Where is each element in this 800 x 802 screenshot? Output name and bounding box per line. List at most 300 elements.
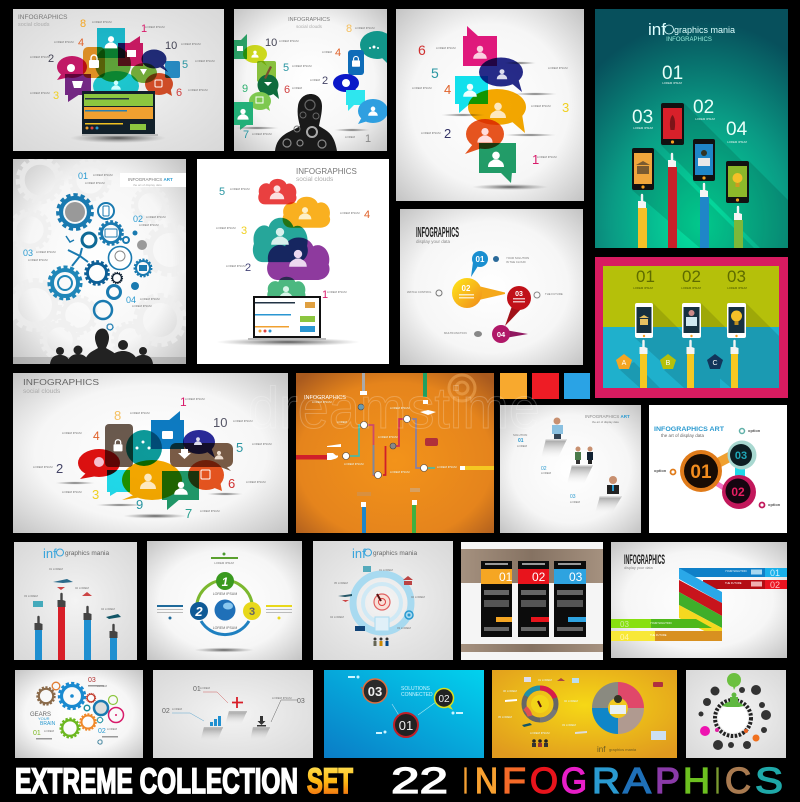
numbered labels: LOREM IPSUM — [188, 88, 208, 92]
numbered labels: 5 — [236, 440, 243, 455]
numbered labels: 9 — [242, 83, 248, 95]
numbered labels: LOREM IPSUM — [252, 442, 272, 446]
numbered labels: LOREM IPSUM — [139, 223, 159, 227]
numbered labels: LOREM IPSUM — [279, 39, 299, 43]
top caption — [211, 552, 238, 565]
bottom bands: THE FUTURE — [650, 633, 667, 637]
labels: 01 LOREM — [379, 568, 394, 572]
brand: graphics mania — [609, 747, 637, 752]
labels: 05 LOREM — [334, 581, 349, 585]
numbered labels: LOREM IPSUM — [537, 155, 557, 159]
numbered labels: 3 — [92, 487, 99, 502]
numbered labels — [30, 18, 215, 102]
numbered labels: 4 — [78, 37, 84, 49]
numbered labels: LOREM IPSUM — [146, 215, 166, 219]
numbered labels: LOREM IPSUM — [292, 64, 312, 68]
title: inf — [352, 546, 366, 561]
labels: 02 LOREM — [564, 699, 579, 703]
bubbles — [455, 26, 526, 183]
numbers — [632, 63, 748, 144]
droplets: 04 — [497, 330, 506, 339]
badge 01: 01 — [399, 718, 413, 733]
title: 22 infographics: P — [655, 760, 680, 801]
panel: globe cycle — [147, 541, 302, 660]
heading: display your data — [624, 566, 654, 570]
droplets — [452, 251, 531, 343]
long shadows — [620, 303, 779, 388]
title — [352, 546, 417, 561]
nodes and globe: 1 — [222, 575, 229, 589]
bubbles — [698, 673, 771, 750]
icons — [33, 579, 121, 619]
droplets: 03 — [515, 291, 523, 298]
numbered labels: LOREM IPSUM — [62, 490, 82, 494]
numbered labels: 8 — [114, 408, 121, 423]
labels: WATCH CONTROL — [407, 290, 432, 294]
title: graphics mania — [373, 550, 417, 557]
numbered labels: LOREM IPSUM — [531, 104, 551, 108]
title: extreme collection set: SET — [307, 762, 353, 801]
numbered labels: 5 — [182, 59, 188, 71]
numbers: LOREM IPSUM — [727, 140, 747, 144]
numbered labels: LOREM IPSUM — [272, 696, 292, 700]
numbered labels: LOREM IPSUM — [30, 91, 50, 95]
heading: INFOGRAPHICS — [23, 378, 99, 387]
numbered labels: LOREM IPSUM — [246, 480, 266, 484]
ring and target — [353, 574, 411, 632]
bottom bands: 04 — [620, 633, 629, 642]
heading: the art of display data — [133, 183, 162, 187]
numbered labels: LOREM IPSUM — [548, 66, 568, 70]
nodes and globe: LOREM IPSUM — [213, 592, 237, 596]
icons and captions: LOREM — [337, 420, 348, 424]
people ring — [715, 692, 751, 736]
title: 22 infographics: A — [623, 760, 651, 801]
blue gears — [49, 195, 151, 330]
title: 22 infographics: R — [592, 760, 620, 801]
labels: 06 LOREM — [503, 689, 518, 693]
numbered labels: 7 — [243, 129, 249, 141]
panel: stacked clouds — [197, 159, 389, 364]
labels: IN THE CLOUD — [506, 260, 526, 264]
icons and captions: LOREM IPSUM — [390, 470, 410, 474]
clouds — [253, 179, 330, 302]
panel: icons on steps — [153, 670, 313, 758]
panel: target bulb — [313, 541, 453, 660]
people — [552, 418, 619, 494]
panel: droplet diagram — [400, 209, 583, 365]
labels: 02 LOREM — [75, 586, 90, 590]
panel: social clouds with gear silhouette — [234, 9, 394, 151]
laptop — [216, 296, 360, 346]
arms and hands — [638, 153, 743, 248]
numbered labels: LOREM — [345, 135, 356, 139]
cycle ring — [197, 580, 252, 635]
long shadows — [632, 103, 788, 248]
icons and captions: LOREM IPSUM — [344, 462, 364, 466]
option markers: option — [768, 502, 781, 507]
numbered labels: 4 — [364, 209, 370, 221]
numbered labels: 6 — [284, 84, 290, 96]
phones — [635, 303, 746, 338]
numbers: 01 — [662, 63, 683, 84]
title: 22 infographics: I — [715, 760, 720, 801]
numbered labels: 1 — [365, 133, 371, 145]
numbered labels: 4 — [444, 82, 451, 97]
labels: 03 — [570, 494, 576, 500]
numbered labels: 2 — [48, 53, 54, 65]
title — [43, 546, 109, 561]
numbered labels — [33, 395, 272, 521]
labels — [498, 678, 579, 735]
panel: yellow pie wheel — [492, 670, 677, 758]
caption: SOLUTIONS — [401, 686, 431, 692]
panel: gears brain — [15, 670, 143, 758]
title: 22 infographics: F — [502, 760, 526, 801]
badge 03 — [361, 679, 387, 703]
numbered labels: LOREM — [97, 684, 108, 688]
icons and captions: LOREM IPSUM — [437, 465, 457, 469]
flow line — [350, 419, 435, 475]
nodes and globe — [190, 572, 261, 630]
spiral — [449, 375, 475, 401]
left bubbles — [234, 34, 279, 130]
panel: pink frame phones — [595, 257, 788, 398]
numbered labels: 3 — [562, 100, 569, 115]
heading: INFOGRAPHICS — [304, 395, 346, 401]
heading — [416, 224, 459, 244]
numbered labels: LOREM IPSUM — [421, 131, 441, 135]
numbered labels: LOREM IPSUM — [252, 132, 272, 136]
bottom bands: 03 — [620, 620, 629, 629]
labels: 01 — [518, 438, 524, 444]
panel: social circle — [686, 670, 786, 758]
numbers: LOREM IPSUM — [633, 286, 653, 290]
panel: connected 01 02 03 circles — [649, 405, 787, 533]
title: 22 infographics: C — [725, 760, 751, 801]
numbered labels — [23, 171, 166, 308]
arms — [640, 340, 738, 388]
circle 01: 01 — [690, 462, 712, 483]
pentagon badges — [616, 354, 723, 369]
labels: 02 — [541, 466, 547, 472]
card 01 — [481, 561, 513, 637]
brand — [597, 745, 637, 754]
connectors — [716, 454, 740, 492]
caption: CONNECTED — [401, 692, 433, 698]
numbered labels: LOREM — [200, 686, 211, 690]
labels: LOREM IPSUM — [530, 731, 550, 735]
pale background gears — [11, 158, 194, 358]
caption — [30, 712, 56, 727]
heading: social clouds — [23, 388, 61, 395]
numbered labels: 6 — [228, 476, 235, 491]
card 02: 02 — [532, 570, 546, 584]
numbered labels: LOREM IPSUM — [216, 226, 236, 230]
numbered labels: 1 — [532, 152, 539, 167]
numbers: 02 — [693, 97, 714, 118]
bottom bands — [611, 619, 722, 642]
numbers — [634, 270, 747, 289]
heading: social clouds — [18, 22, 50, 28]
numbered labels: LOREM IPSUM — [36, 250, 56, 254]
labels: 05 LOREM — [498, 715, 513, 719]
numbered labels: 2 — [245, 262, 251, 274]
panel: blue circles — [324, 670, 484, 758]
heading: INFOGRAPHICS ART — [585, 414, 630, 419]
title: 22 infographics: G — [561, 760, 587, 801]
bottom bands: YOUR SOLUTION — [650, 621, 672, 625]
heading: the art of display data — [592, 420, 619, 424]
shadows — [441, 62, 557, 190]
labels: YOUR SOLUTION — [506, 256, 529, 260]
steps — [541, 439, 622, 513]
numbers: LOREM IPSUM — [662, 81, 682, 85]
numbered labels — [162, 686, 305, 715]
heading: INFOGRAPHICS ART — [654, 427, 724, 433]
labels: LOREM — [517, 444, 528, 448]
labels: 03 LOREM — [562, 723, 577, 727]
card 01: 01 — [499, 570, 513, 584]
badge 02: 02 — [438, 694, 450, 705]
labels: SOLUTION — [513, 433, 527, 437]
labels: 04 LOREM — [101, 607, 116, 611]
caption: BRAIN — [40, 721, 56, 727]
numbered labels: 6 — [176, 87, 182, 99]
nodes and globe: 3 — [249, 606, 255, 618]
title: extreme collection set: EXTREME COLLECTION — [15, 762, 298, 801]
numbers: LOREM IPSUM — [633, 126, 653, 130]
numbers: LOREM IPSUM — [727, 286, 747, 290]
droplets: 02 — [462, 284, 471, 293]
labels — [24, 567, 116, 611]
numbered labels: LOREM IPSUM — [28, 258, 48, 262]
labels: LOREM — [570, 500, 581, 504]
title: 22 infographics: O — [530, 760, 558, 801]
top bands: 02 — [770, 580, 780, 590]
title: inf — [648, 20, 666, 39]
numbered labels: LOREM IPSUM — [412, 86, 432, 90]
heading — [120, 173, 186, 187]
numbered labels: LOREM IPSUM — [195, 59, 215, 63]
heading — [23, 378, 99, 395]
heading: social clouds — [296, 24, 323, 29]
numbers: LOREM IPSUM — [681, 286, 701, 290]
numbered labels: LOREM IPSUM — [145, 25, 165, 29]
numbered labels: 9 — [136, 497, 143, 512]
top bands: THE FUTURE — [725, 581, 742, 585]
title: inf — [43, 546, 57, 561]
pentagon badges: C — [712, 360, 718, 367]
pie — [592, 682, 644, 734]
nodes and globe: LOREM IPSUM — [213, 626, 237, 630]
numbered labels — [412, 42, 569, 167]
pentagon badges: A — [622, 360, 627, 367]
icons and captions: LOREM IPSUM — [378, 435, 398, 439]
numbered labels: 8 — [346, 23, 352, 35]
silhouettes — [13, 328, 186, 364]
circle 03: 03 — [735, 450, 747, 462]
numbers: 04 — [726, 119, 748, 140]
badge 02 — [418, 688, 454, 715]
badge 01 — [392, 704, 418, 737]
numbered labels: LOREM IPSUM — [130, 411, 150, 415]
heading — [654, 427, 724, 438]
circle 02: 02 — [731, 485, 745, 499]
numbered labels: 4 — [335, 47, 341, 59]
side captions — [157, 605, 292, 620]
phones — [632, 103, 749, 203]
numbered labels: 2 — [444, 126, 451, 141]
labels: 02 LOREM — [411, 595, 426, 599]
gear silhouette — [275, 94, 337, 151]
title: 22 infographics: S — [755, 760, 783, 801]
numbered labels: 5 — [431, 65, 439, 81]
droplets: 01 — [476, 255, 485, 264]
panel: folded ribbons: INFOGRAPHICS — [624, 551, 665, 567]
arms and hands — [34, 593, 118, 660]
panel: pricing cards — [461, 542, 603, 660]
numbered labels: LOREM IPSUM — [230, 187, 250, 191]
panel: social clouds with laptop — [13, 9, 224, 151]
numbered labels: 02 — [133, 214, 143, 224]
numbered labels: 1 — [180, 395, 187, 409]
numbered labels — [242, 23, 375, 145]
numbered labels: 01 — [193, 686, 201, 693]
labels: LOREM — [541, 471, 552, 475]
numbered labels: LOREM IPSUM — [132, 304, 152, 308]
numbers: 02 — [682, 267, 701, 286]
labels: 01 LOREM — [538, 678, 553, 682]
numbered labels: 01 — [33, 730, 41, 737]
numbered labels: 02 — [98, 728, 106, 735]
numbered labels: LOREM IPSUM — [33, 465, 53, 469]
shadow — [194, 648, 254, 652]
heading: INFOGRAPHICS — [18, 14, 68, 21]
numbered labels — [33, 677, 118, 740]
numbered labels: LOREM IPSUM — [140, 297, 160, 301]
labels: 03 LOREM — [397, 626, 412, 630]
numbered labels: LOREM IPSUM — [340, 211, 360, 215]
numbered labels: 10 — [265, 37, 277, 49]
labels: 01 LOREM — [49, 567, 64, 571]
title: 22 infographics — [391, 760, 783, 801]
heading: the art of display data — [661, 433, 705, 438]
heading: social clouds — [296, 176, 334, 183]
numbered labels: 3 — [53, 90, 59, 102]
numbered labels: 8 — [80, 18, 86, 30]
icons and captions: LOREM IPSUM — [390, 406, 410, 410]
labels — [407, 256, 563, 337]
numbered labels: LOREM IPSUM — [93, 173, 113, 177]
numbered labels: 2 — [56, 461, 63, 476]
small icons — [505, 677, 666, 747]
numbered labels: 04 — [126, 295, 136, 305]
numbered labels: LOREM IPSUM — [233, 419, 253, 423]
bubbles — [78, 411, 233, 510]
title: graphics mania — [674, 25, 735, 35]
numbers: 01 — [636, 267, 655, 286]
numbered labels: LOREM IPSUM — [185, 397, 205, 401]
labels: MULTIFUNCTION — [444, 331, 467, 335]
title — [649, 23, 735, 41]
numbered labels: 1 — [141, 23, 147, 35]
icons — [338, 566, 413, 646]
nodes — [342, 404, 428, 478]
numbered labels: LOREM — [322, 50, 333, 54]
numbered labels: LOREM — [44, 729, 55, 733]
callout lines — [172, 692, 298, 722]
pentagon badges: B — [666, 360, 671, 367]
heading — [585, 414, 630, 424]
numbered labels — [216, 186, 370, 301]
panel: folded ribbons — [611, 542, 787, 658]
panel: teal phones mania — [595, 9, 788, 248]
caption — [348, 676, 463, 734]
speech bubble cluster — [57, 28, 180, 102]
title: INFOGRAPHICS — [666, 37, 712, 43]
labels — [513, 433, 581, 504]
arms — [296, 373, 494, 533]
badge 03: 03 — [368, 684, 382, 699]
numbered labels: LOREM IPSUM — [200, 509, 220, 513]
numbered labels: LOREM IPSUM — [181, 42, 201, 46]
card 02 — [518, 561, 549, 637]
gears — [37, 682, 124, 744]
title: graphics mania — [65, 550, 109, 557]
title: 22 infographics: I — [463, 760, 468, 801]
brand: inf — [597, 745, 606, 754]
watermark: dreamstime — [248, 376, 540, 441]
numbered labels: 2 — [322, 75, 328, 87]
caption: GEARS — [30, 712, 51, 718]
panel: orange hands flow — [296, 373, 494, 533]
icons — [210, 697, 266, 726]
panel: overlapping user bubbles — [396, 9, 584, 201]
numbered labels: 03 — [88, 677, 96, 684]
heading: INFOGRAPHICS ART — [128, 177, 173, 182]
numbered labels: 1 — [322, 289, 328, 301]
numbered labels: LOREM — [172, 707, 183, 711]
numbered labels: LOREM IPSUM — [355, 26, 375, 30]
heading: display your data — [416, 239, 451, 244]
numbered labels: LOREM IPSUM — [92, 20, 112, 24]
numbered labels: 5 — [283, 62, 289, 74]
option markers: option — [654, 468, 667, 473]
heading: INFOGRAPHICS — [288, 17, 330, 23]
title: 22 infographics: 22 — [391, 760, 448, 801]
panel: gears infographic art — [11, 158, 194, 364]
numbered labels: LOREM — [292, 86, 303, 90]
right bubbles — [333, 31, 387, 132]
numbered labels: 6 — [418, 42, 426, 58]
title: 22 infographics: H — [683, 760, 710, 801]
option markers — [654, 428, 781, 508]
top bands: YOUR SOLUTION — [725, 569, 747, 573]
numbered labels: 03 — [23, 248, 33, 258]
labels: 04 LOREM — [330, 615, 345, 619]
numbered labels: 10 — [165, 40, 177, 52]
nodes and globe: 2 — [194, 604, 203, 619]
heading — [288, 17, 330, 29]
icons and captions — [327, 406, 457, 496]
top caption: LOREM IPSUM — [214, 561, 234, 565]
numbered labels: 7 — [185, 506, 192, 521]
panel: droplet diagram: INFOGRAPHICS — [416, 224, 459, 241]
numbered labels: LOREM IPSUM — [436, 46, 456, 50]
panel: hands with info icons — [14, 542, 137, 660]
numbered labels: 3 — [241, 225, 247, 237]
